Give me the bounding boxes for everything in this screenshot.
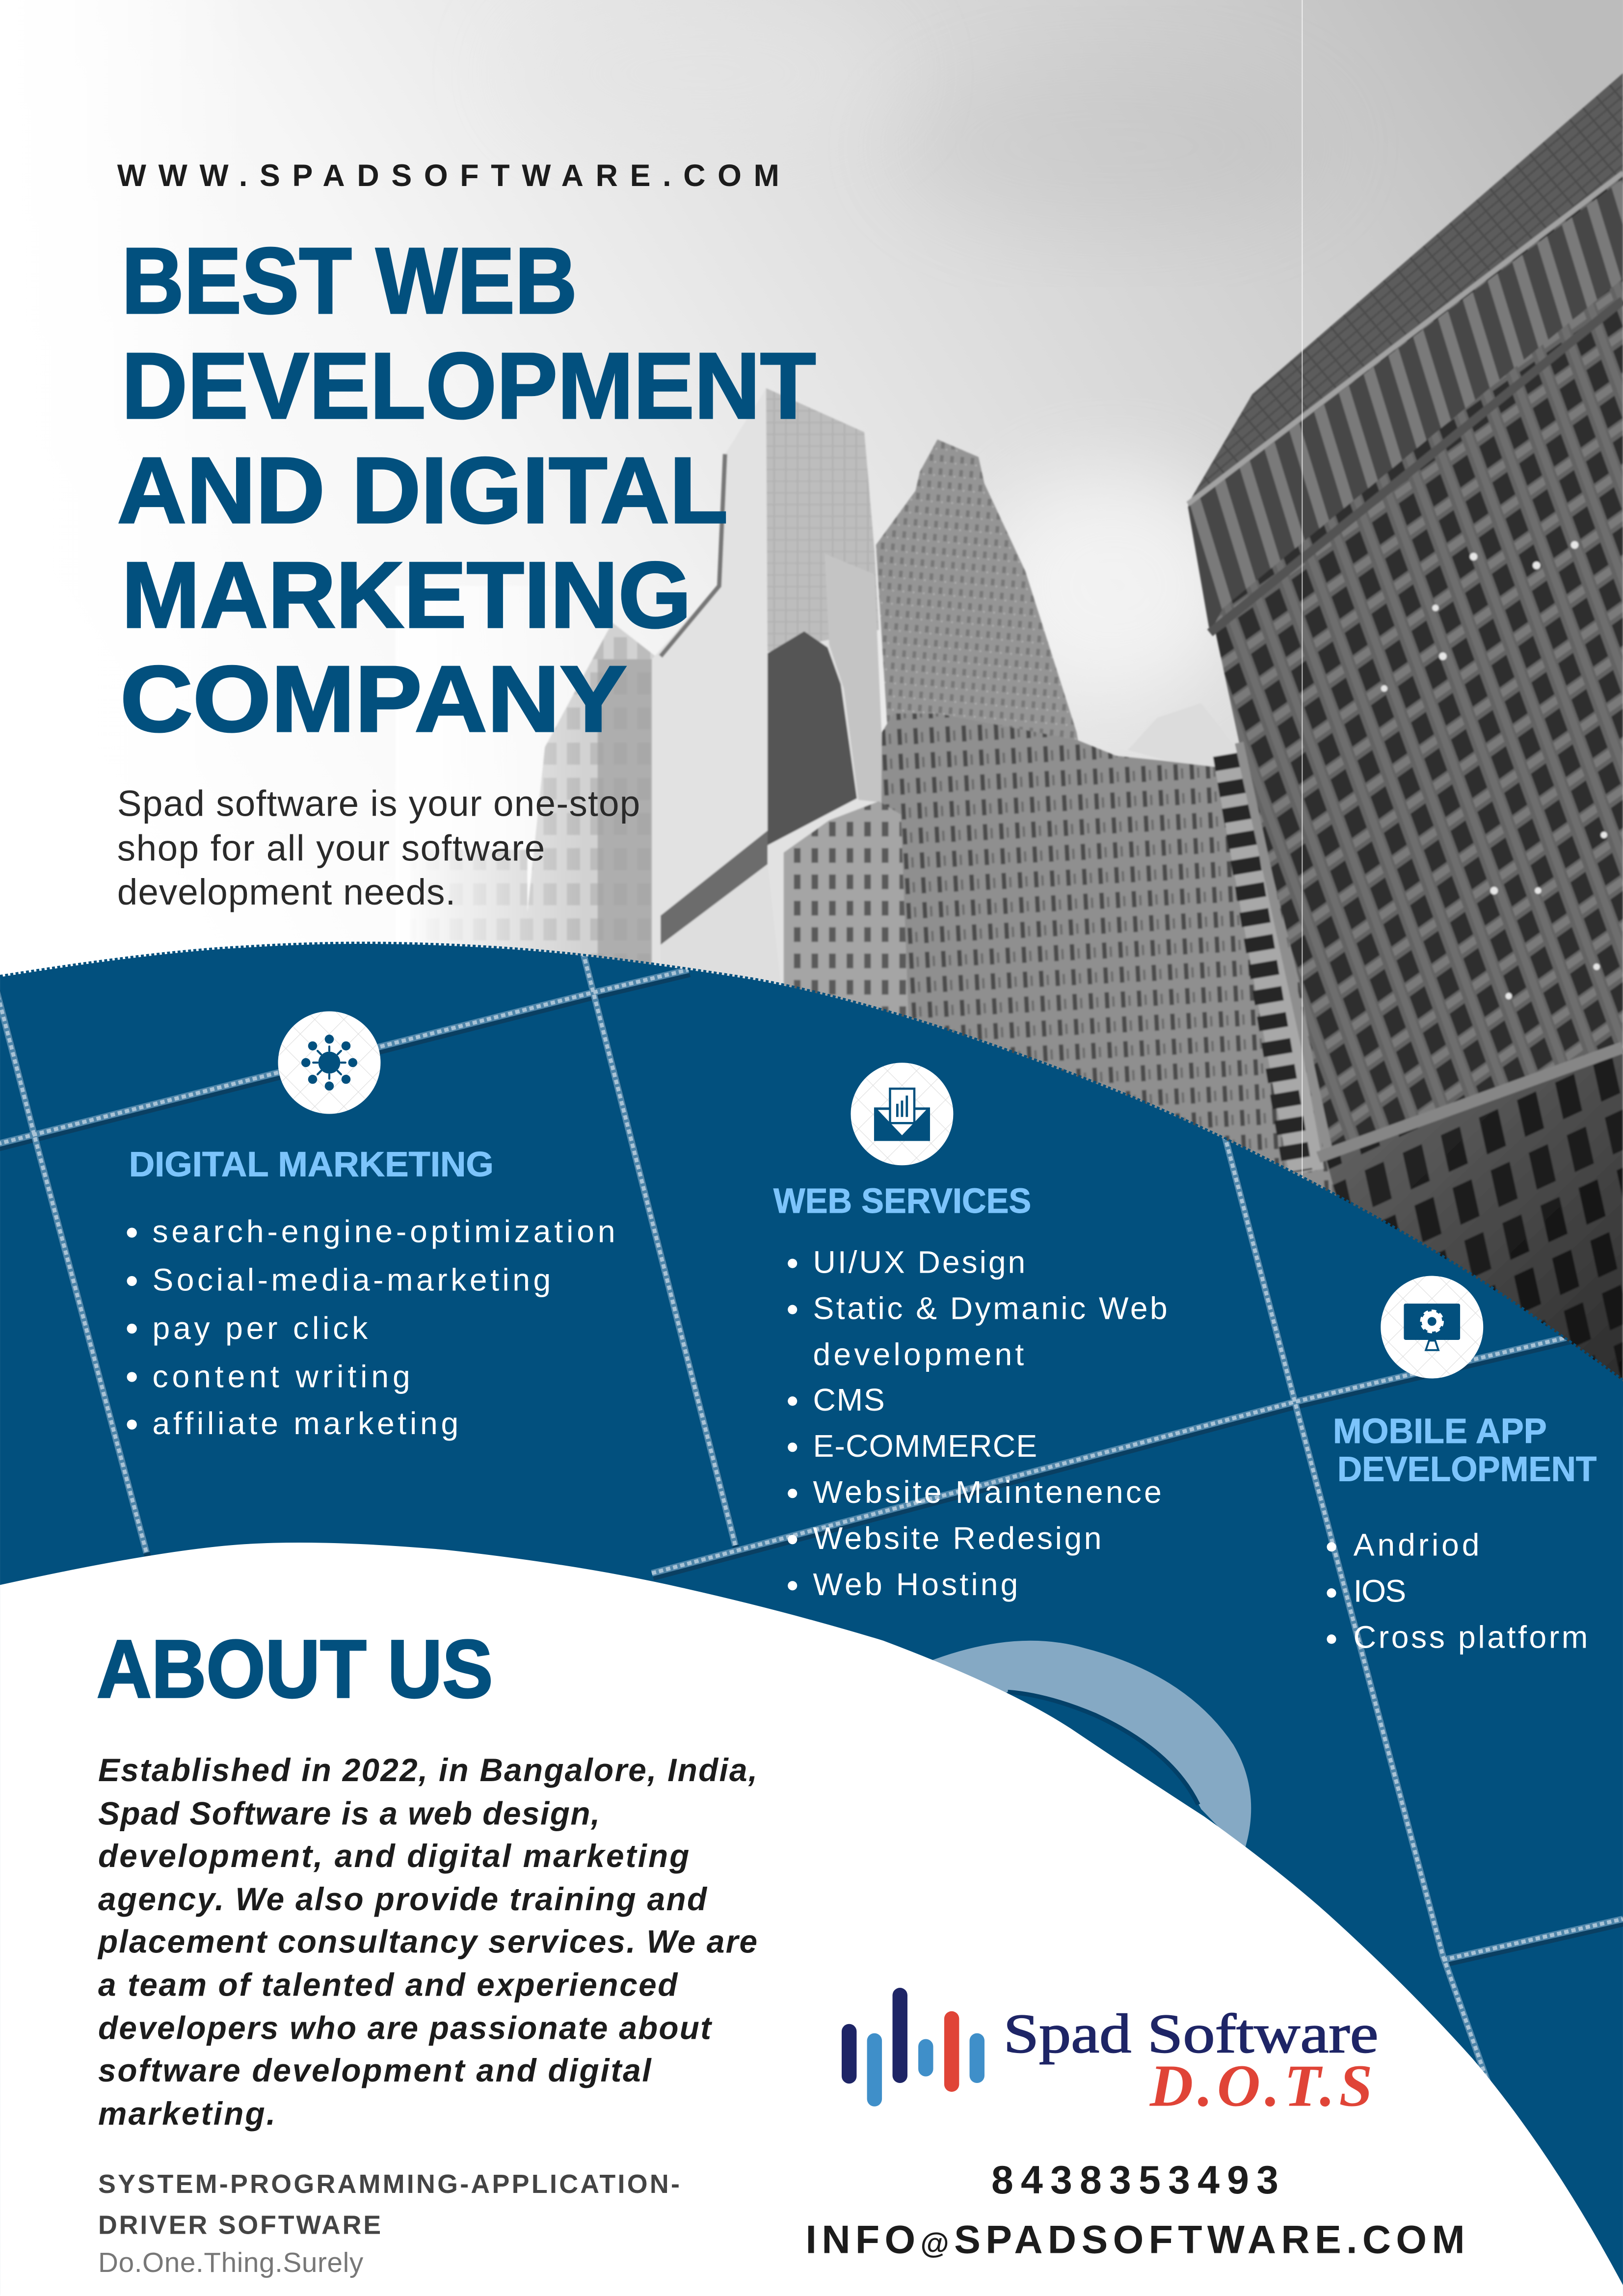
mid-rise building block <box>784 703 1406 1406</box>
list: web services items: UI/UX Design <box>813 1245 1025 1280</box>
panel: digital marketing <box>127 1012 615 1441</box>
list: mobile platforms <box>1327 1527 1588 1655</box>
heading: web services: WEB SERVICES <box>773 1181 1031 1221</box>
icon: monitor with gear <box>1381 1276 1483 1378</box>
contact phone: 8438353493 <box>991 2158 1278 2202</box>
tagline: Do.One.Thing.Surely <box>98 2247 364 2278</box>
about us text block: Spad Software is a web design, <box>98 1795 600 1831</box>
heading: mobile app development: MOBILE APP <box>1333 1412 1547 1451</box>
website url: WWW.SPADSOFTWARE.COM <box>117 159 779 193</box>
about us text block: software development and digital <box>98 2053 652 2088</box>
list: web services items: CMS <box>813 1382 885 1417</box>
list: digital marketing services: content writing <box>152 1359 410 1394</box>
list: web services items: Website Redesign <box>813 1521 1101 1556</box>
contact email: INFO @ SPADSOFTWARE.COM <box>806 2217 1465 2262</box>
title: AND DIGITAL <box>117 438 728 543</box>
sky <box>0 0 1623 1465</box>
tagline <box>98 2169 680 2278</box>
about us text block: agency. We also provide training and <box>98 1881 708 1917</box>
glass tower <box>652 388 885 1025</box>
heading: mobile app development: DEVELOPMENT <box>1337 1449 1596 1489</box>
heading: about us: ABOUT US <box>97 1624 493 1715</box>
title: DEVELOPMENT <box>122 334 816 438</box>
title: MARKETING <box>122 543 692 647</box>
panel: web services <box>773 1063 1168 1602</box>
title: COMPANY <box>120 647 627 751</box>
logo: Spad Software D.O.T.S <box>842 1988 1379 2119</box>
tagline: DRIVER SOFTWARE <box>98 2210 381 2240</box>
about us text block: a team of talented and experienced <box>98 1967 678 2002</box>
about us text block: Established in 2022, in Bangalore, India, <box>98 1752 757 1788</box>
intro text: Spad software is your one-stop <box>117 782 640 824</box>
list: web services items: Web Hosting <box>813 1567 1018 1602</box>
list: web services items <box>788 1245 1168 1602</box>
list: mobile platforms: IOS <box>1354 1574 1406 1609</box>
list: mobile platforms: Cross platform <box>1354 1620 1588 1655</box>
faded distant buildings <box>396 586 659 982</box>
list: web services items: Static & Dymanic Web <box>813 1291 1168 1326</box>
icon: network hub <box>278 1012 380 1114</box>
art-deco tower <box>876 439 1084 776</box>
pale arch accent <box>908 1641 1251 1853</box>
logo subtitle: D.O.T.S <box>1149 2053 1373 2119</box>
list: digital marketing services: affiliate marketing <box>152 1406 458 1441</box>
about us text block: developers who are passionate about <box>98 2010 713 2046</box>
title: BEST WEB <box>122 229 577 333</box>
list: digital marketing services: Social-media-marketing <box>152 1262 551 1297</box>
intro text: development needs. <box>117 871 455 912</box>
panel: blue curved services band <box>0 944 1623 2296</box>
background photo: city skyline <box>0 0 1623 1465</box>
list: web services items: development <box>813 1337 1024 1372</box>
about us text block <box>97 1752 757 2132</box>
right foreground building <box>1188 73 1623 1406</box>
logo wordmark: Spad Software <box>1003 2002 1379 2064</box>
about us text block: development, and digital marketing <box>98 1838 689 1874</box>
list: digital marketing services: search-engine-optimization <box>152 1214 615 1249</box>
list: digital marketing services <box>127 1214 615 1441</box>
buildings <box>396 73 1623 1406</box>
title <box>117 229 816 751</box>
intro text: shop for all your software <box>117 827 545 868</box>
panel: white lower section <box>0 1543 1623 2296</box>
list: digital marketing services: pay per click <box>152 1310 368 1346</box>
logo mark: sound bars <box>842 1988 984 2107</box>
list: web services items: E-COMMERCE <box>813 1428 1037 1464</box>
panel: mobile app development <box>1327 1276 1596 1655</box>
intro text <box>117 782 640 912</box>
list: web services items: Website Maintenence <box>813 1474 1162 1510</box>
about us text block: marketing. <box>98 2096 275 2132</box>
list: mobile platforms: Andriod <box>1354 1527 1479 1563</box>
thin vertical seam line <box>1302 0 1303 1186</box>
tagline: SYSTEM-PROGRAMMING-APPLICATION- <box>98 2169 680 2199</box>
heading: digital marketing: DIGITAL MARKETING <box>129 1145 494 1184</box>
icon: envelope with chart <box>851 1063 953 1165</box>
heading: mobile app development <box>1333 1412 1596 1489</box>
about us text block: placement consultancy services. We are <box>97 1923 757 1959</box>
